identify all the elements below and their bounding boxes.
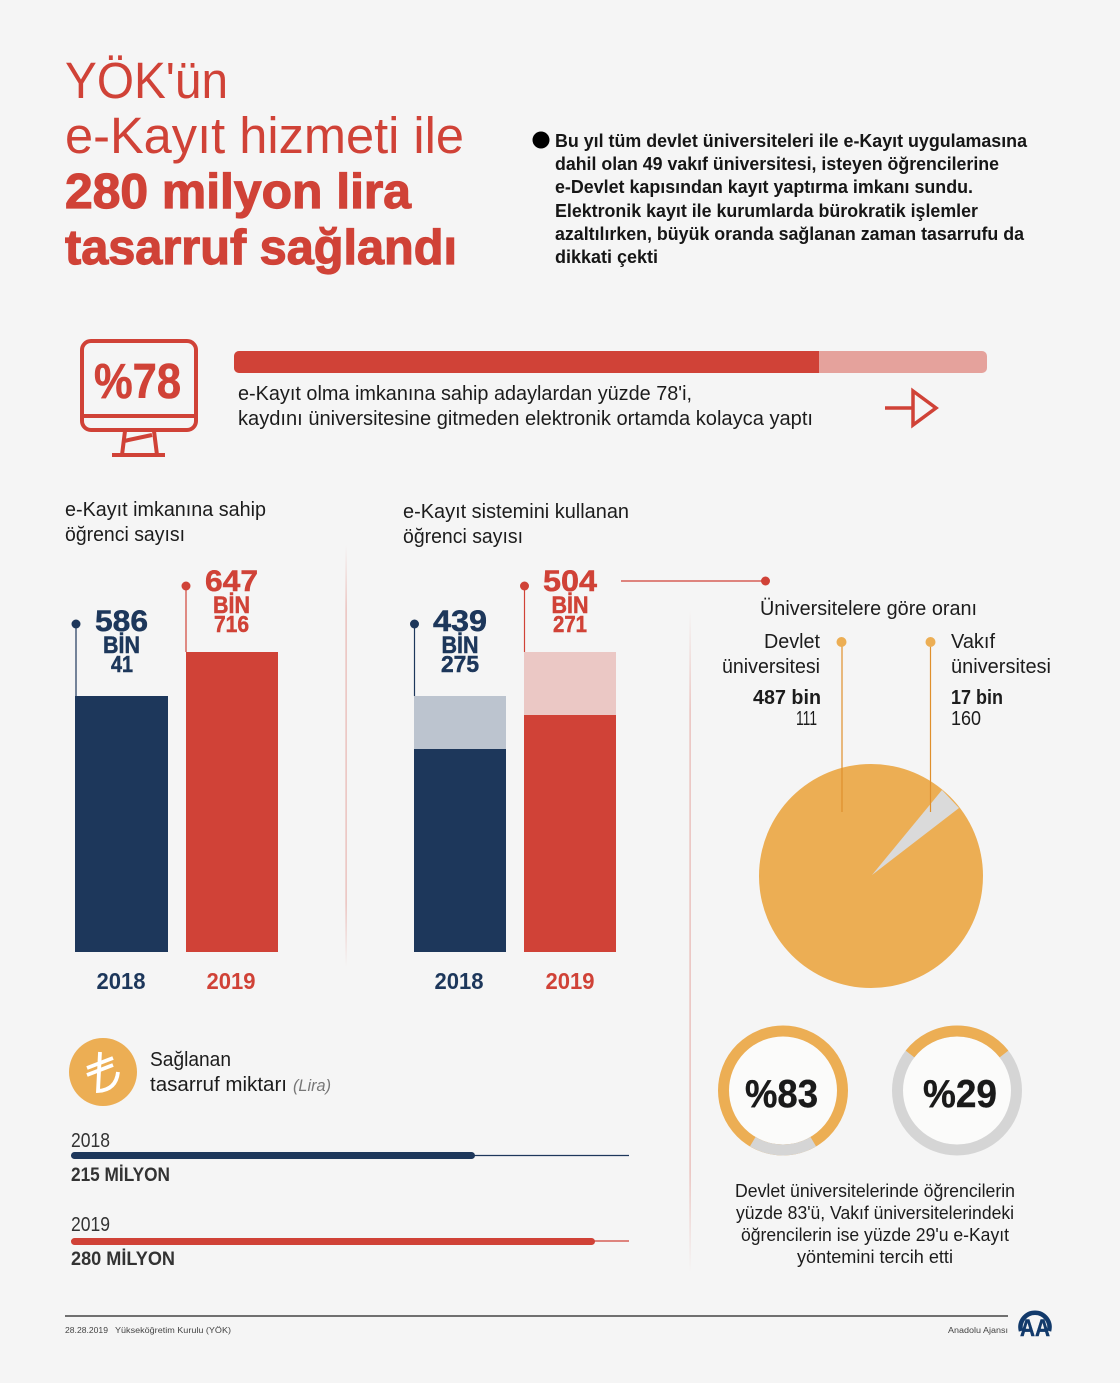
- title: YÖK'ün: [65, 52, 228, 109]
- progress bar caption: [238, 383, 813, 430]
- heading: system users: [403, 501, 629, 548]
- pie label: foundation universities: Vakıf: [951, 631, 995, 653]
- footer: 28.28.2019: [65, 1326, 109, 1335]
- savings bar: 2018: 2018: [71, 1130, 110, 1152]
- donut: 83 percent: %83: [745, 1073, 818, 1116]
- bar chart: system users: 275: [441, 651, 479, 677]
- bar chart: system users: 2019: [546, 968, 594, 994]
- savings heading: [150, 1049, 331, 1096]
- pie label: foundation universities: 17 bin: [951, 687, 1003, 709]
- savings bar: 2019: [71, 1214, 629, 1270]
- pie heading: Üniversitelere göre oranı: [760, 598, 977, 620]
- donut: 29 percent: [898, 1031, 1016, 1150]
- intro text block: e-Devlet kapısından kayıt yaptırma imkanı sundu.: [555, 177, 973, 197]
- donut caption: öğrencilerin ise yüzde 29'u e-Kayıt: [741, 1225, 1009, 1245]
- icon: lira coin: [69, 1038, 137, 1106]
- intro text block: Elektronik kayıt ile kurumlarda bürokratik işlemler: [555, 201, 978, 221]
- bar chart: eligible students: BİN: [213, 592, 250, 619]
- donut caption: yöntemini tercih etti: [797, 1247, 953, 1267]
- bar chart: system users: BİN: [442, 632, 478, 659]
- pie label: foundation universities: üniversitesi: [951, 656, 1051, 678]
- pie label: state universities: Devlet: [764, 631, 820, 653]
- heading: eligible students: e-Kayıt imkanına sahip: [65, 499, 266, 521]
- icon: monitor with 78 percent: %78: [94, 355, 181, 409]
- donut caption: Devlet üniversitelerinde öğrencilerin: [735, 1181, 1015, 1201]
- heading: system users: öğrenci sayısı: [403, 526, 523, 548]
- pie label: foundation universities: [951, 631, 1051, 730]
- savings heading: Sağlanan: [150, 1049, 231, 1071]
- progress bar caption: e-Kayıt olma imkanına sahip adaylardan yüzde 78'i,: [238, 383, 692, 405]
- pie chart: by university type: [759, 637, 983, 988]
- bar chart: system users: [410, 565, 616, 994]
- donut caption: [735, 1181, 1015, 1267]
- savings bar: 2019: 280 MİLYON: [71, 1249, 175, 1270]
- divider: [346, 545, 347, 967]
- intro text block: dikkati çekti: [555, 247, 658, 267]
- bar chart: eligible students: 41: [111, 651, 133, 677]
- bar chart: eligible students: 647: [205, 565, 258, 598]
- heading: eligible students: öğrenci sayısı: [65, 524, 185, 546]
- footer: [65, 1316, 1008, 1335]
- heading: system users: e-Kayıt sistemini kullanan: [403, 501, 629, 523]
- donut: 29 percent: %29: [923, 1073, 997, 1116]
- footer: Anadolu Ajansı: [948, 1326, 1008, 1335]
- intro text block: [532, 131, 1028, 267]
- pie label: foundation universities: 160: [951, 708, 981, 730]
- connector to university breakdown: [621, 576, 770, 586]
- icon: monitor with 78 percent: [82, 341, 196, 455]
- savings bar: 2019: 2019: [71, 1214, 110, 1236]
- savings bar: 2018: [71, 1130, 629, 1186]
- footer: Yükseköğretim Kurulu (YÖK): [115, 1326, 231, 1335]
- heading: eligible students: [65, 499, 266, 546]
- title: e-Kayıt hizmeti ile: [65, 107, 464, 164]
- intro text block: dahil olan 49 vakıf üniversitesi, isteyen öğrencilerine: [555, 154, 999, 174]
- divider: [690, 610, 691, 1272]
- icon: arrow: [885, 391, 936, 425]
- intro text block: azaltılırken, büyük oranda sağlanan zaman tasarrufu da: [555, 224, 1025, 244]
- progress bar 78 percent: [234, 351, 987, 373]
- title: tasarruf sağlandı: [65, 221, 457, 275]
- bar chart: eligible students: 586: [95, 605, 148, 638]
- bar chart: system users: 504: [543, 565, 597, 598]
- savings heading: tasarruf miktarı: [150, 1074, 287, 1096]
- title: [65, 52, 464, 275]
- bar chart: system users: 2018: [434, 968, 484, 994]
- savings bar: 2018: 215 MİLYON: [71, 1165, 170, 1186]
- bar chart: eligible students: 2019: [206, 968, 256, 994]
- donut caption: yüzde 83'ü, Vakıf üniversitelerindeki: [736, 1203, 1014, 1223]
- pie label: state universities: 111: [796, 708, 817, 730]
- pie label: state universities: [722, 631, 821, 730]
- pie label: state universities: üniversitesi: [722, 656, 820, 678]
- icon: Anadolu Agency logo: AA: [1020, 1315, 1050, 1342]
- bar chart: eligible students: [72, 565, 278, 994]
- title: 280 milyon lira: [65, 165, 412, 219]
- bar chart: eligible students: 716: [214, 611, 249, 637]
- intro text block: Bu yıl tüm devlet üniversiteleri ile e-Kayıt uygulamasına: [555, 131, 1028, 151]
- bar chart: system users: BİN: [552, 592, 588, 619]
- bar chart: system users: 439: [433, 605, 487, 638]
- pie label: state universities: 487 bin: [753, 687, 821, 709]
- donut: 83 percent: [724, 1031, 842, 1150]
- savings heading: (Lira): [293, 1076, 331, 1095]
- progress bar caption: kaydını üniversitesine gitmeden elektronik ortamda kolayca yaptı: [238, 408, 813, 430]
- bar chart: eligible students: 2018: [96, 968, 146, 994]
- bar chart: eligible students: BİN: [103, 632, 140, 659]
- bar chart: system users: 271: [553, 611, 587, 637]
